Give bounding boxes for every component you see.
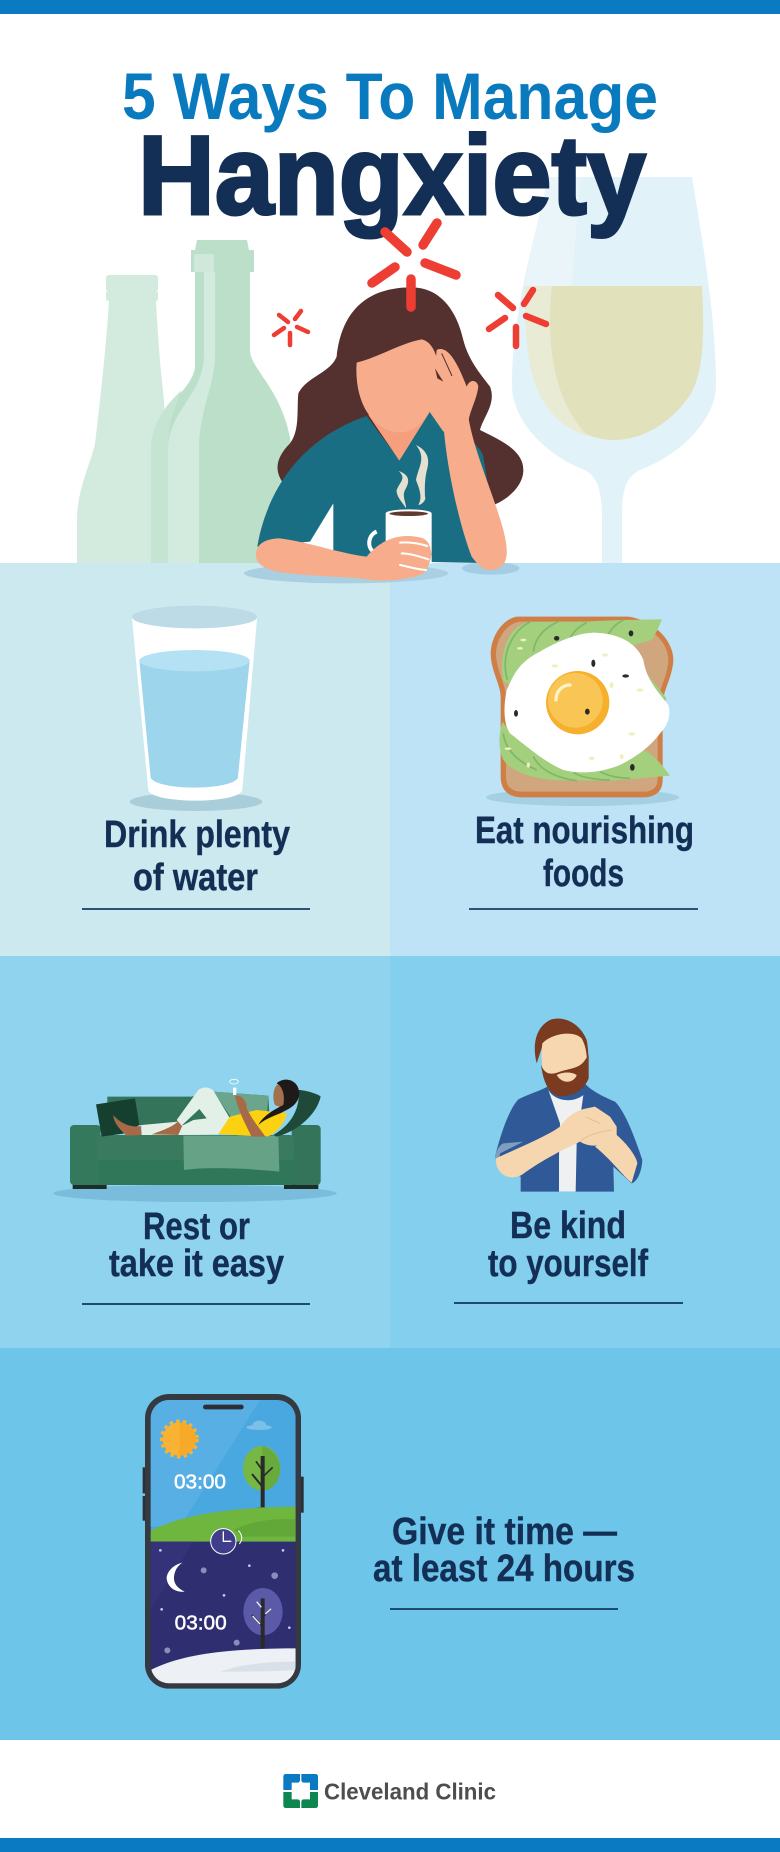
propping arm and hand <box>428 349 507 570</box>
panel: drink water <box>0 563 390 956</box>
label <box>104 814 290 899</box>
wine glass <box>512 177 716 563</box>
label: Drink plenty <box>104 814 290 856</box>
label <box>109 1206 284 1285</box>
woman with headache <box>244 287 523 583</box>
panel: rest <box>0 956 390 1348</box>
label: Be kind <box>510 1205 626 1247</box>
label: of water <box>133 857 258 899</box>
label: at least 24 hours <box>373 1548 635 1590</box>
bottom bar <box>0 1838 780 1852</box>
panel: be kind <box>390 956 780 1348</box>
label <box>488 1205 648 1285</box>
label: take it easy <box>109 1243 284 1285</box>
logo text: Cleveland Clinic <box>324 1778 496 1804</box>
icon: person resting on couch <box>53 1079 337 1202</box>
icon: red burst left <box>274 311 308 345</box>
label <box>373 1511 635 1590</box>
panel: give it time <box>0 1348 780 1740</box>
table shadows <box>244 562 519 583</box>
icon: phone with day and night <box>143 1394 304 1689</box>
label: Give it time — <box>392 1511 617 1553</box>
clock <box>211 1529 242 1554</box>
steam <box>397 445 428 508</box>
label: Eat nourishing <box>475 810 694 852</box>
logo mark <box>283 1774 318 1808</box>
icon: man with hands on chest <box>495 1019 642 1192</box>
title line 2: Hangxiety <box>138 113 646 238</box>
label: to yourself <box>488 1243 648 1285</box>
wine <box>525 286 703 440</box>
label: foods <box>543 853 624 895</box>
label: Rest or <box>143 1206 250 1248</box>
face <box>356 339 439 432</box>
nighttime clock text: 03:00 <box>175 1612 227 1634</box>
shirt <box>257 410 500 563</box>
label <box>475 810 694 895</box>
bottle: left <box>77 275 170 563</box>
top bar <box>0 0 780 14</box>
forearm on table <box>256 536 432 581</box>
title <box>122 59 658 238</box>
logo: Cleveland Clinic <box>283 1774 496 1808</box>
icon: red burst right <box>489 290 546 346</box>
icon: red burst large <box>372 223 456 307</box>
bottle: front <box>151 240 293 563</box>
panel: eat nourishing foods <box>390 563 780 956</box>
icon: glass of water <box>130 606 262 811</box>
icon: avocado toast with egg <box>486 617 679 806</box>
hair <box>278 287 523 510</box>
coffee cup <box>369 509 432 563</box>
daytime clock text: 03:00 <box>174 1471 226 1493</box>
title line 1: 5 Ways To Manage <box>122 59 658 133</box>
neck <box>368 412 430 461</box>
